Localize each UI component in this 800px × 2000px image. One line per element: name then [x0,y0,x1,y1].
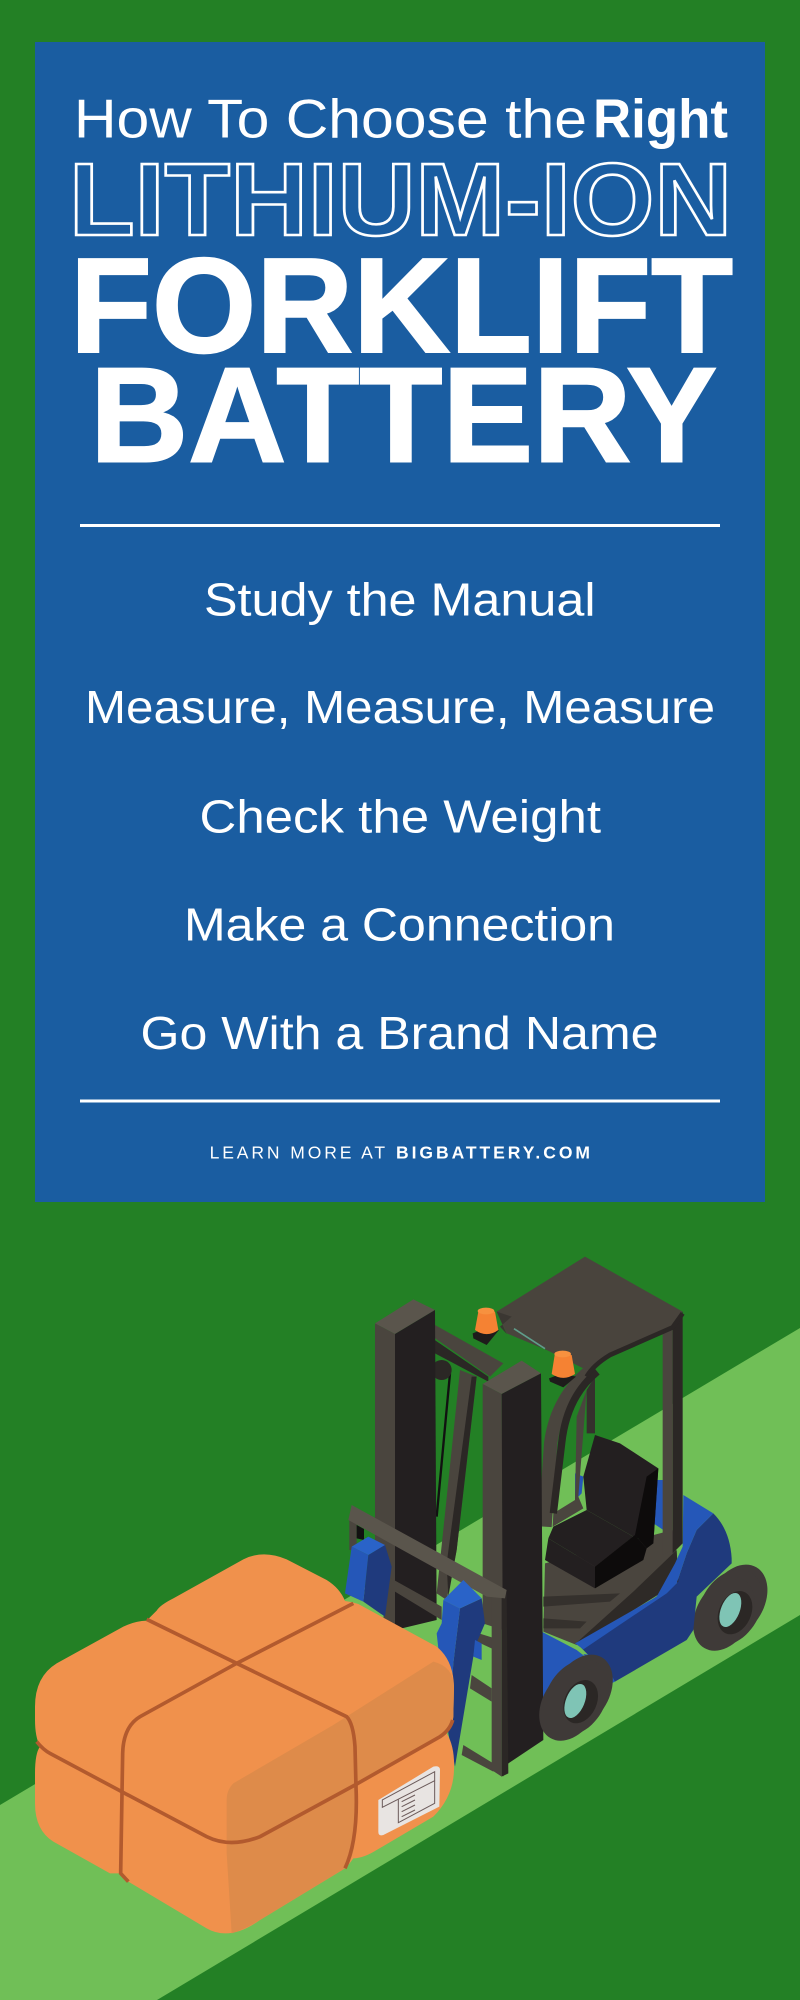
tip 5: Go With a Brand Name [140,1007,658,1059]
seat [545,1435,658,1588]
title line 1: Right [593,88,728,150]
footer: source: BIGBATTERY.COM [396,1142,590,1162]
straps [37,1603,453,1882]
beacon lights [473,1308,576,1387]
illustration: wrapped pallet load [35,1554,454,1933]
shipping label [378,1766,440,1835]
blue fork arms [345,1537,485,1767]
title [69,88,733,490]
title line 1: How To Choose the [74,88,587,150]
rear wheel [681,1554,780,1662]
footer: source: LEARN MORE AT [210,1142,385,1162]
pallet body [35,1554,454,1933]
footer: source [210,1142,590,1162]
title line 4: BATTERY [90,340,717,490]
mast [375,1299,543,1777]
title line 3: FORKLIFT [70,230,733,381]
illustration: forklift [345,1257,780,1777]
cab roof and pillars [497,1257,683,1555]
tip 2: Measure, Measure, Measure [85,681,715,733]
tip 1: Study the Manual [204,574,596,626]
list of tips [85,574,715,1059]
fork carriage [348,1505,508,1777]
forklift body [542,1473,732,1700]
panel: blue title card [35,42,765,1202]
pallet shaded side [227,1662,454,1933]
tip 3: Check the Weight [200,790,601,842]
front wheel [527,1644,625,1752]
tip 4: Make a Connection [184,898,615,950]
title line 2: outlined: LITHIUM-ION [69,142,732,257]
light green floor band [0,1328,800,2000]
